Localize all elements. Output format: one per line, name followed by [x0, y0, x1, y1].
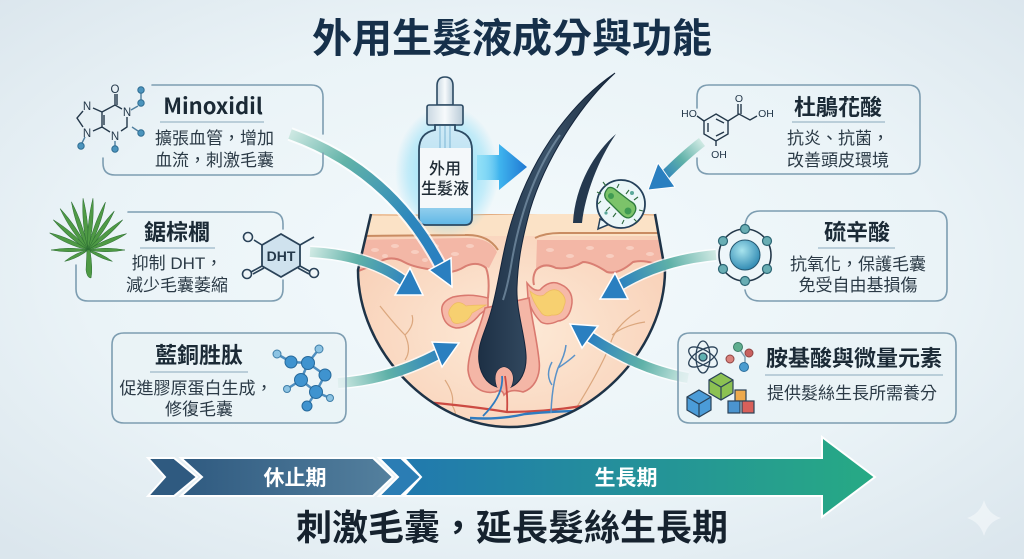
- sebaceous gland right: [527, 283, 572, 324]
- icon: phenolic molecule: [681, 93, 774, 161]
- phase: anagen arrow: 生長期: [594, 467, 658, 490]
- heading: 胺基酸與微量元素: [766, 346, 942, 371]
- phase: telogen: 休止期: [264, 467, 326, 490]
- heading: 硫辛酸: [824, 220, 890, 245]
- phase: telogen: [181, 458, 393, 496]
- hair shaft and bulb: [479, 73, 615, 387]
- heading: Minoxidil: [163, 89, 263, 121]
- arrow: saw palmetto to follicle: [310, 252, 423, 295]
- small hair: [573, 134, 616, 223]
- icon: atom: [686, 341, 720, 373]
- body text: 抑制 DHT，: [132, 254, 222, 273]
- heading: 杜鵑花酸: [794, 95, 882, 120]
- icon: bacteria speech bubble: [597, 180, 645, 229]
- arrow: copper peptide to follicle: [338, 342, 459, 383]
- bottle of topical hair tonic: 外用: [429, 160, 461, 178]
- icon: small molecule: [726, 342, 753, 372]
- panel: lipoic acid: [718, 211, 947, 301]
- icon: DHT molecule: [242, 232, 318, 278]
- icon: minoxidil molecule: N: [111, 131, 119, 143]
- arrow: lipoic acid to follicle: [600, 255, 716, 299]
- arrow: Minoxidil to follicle: [290, 134, 452, 287]
- body text: 抗氧化，保護毛囊: [790, 255, 926, 274]
- icon: minoxidil molecule: [77, 84, 144, 152]
- icon: sparkle watermark: [967, 500, 1001, 536]
- sebaceous gland left: [442, 295, 488, 328]
- icon: phenolic molecule: O: [735, 93, 743, 105]
- bottle of topical hair tonic: 生髮液: [421, 179, 469, 198]
- icon: phenolic molecule: OH: [758, 108, 774, 120]
- icon: minoxidil molecule: N: [83, 128, 91, 140]
- arrow: amino acids to follicle: [570, 324, 688, 378]
- phase chevron start: [148, 458, 197, 496]
- body text: 抗炎、抗菌，: [787, 129, 889, 148]
- bottom summary heading: 刺激毛囊，延長髮絲生長期: [296, 499, 728, 551]
- body text: 擴張血管，增加: [155, 129, 274, 148]
- phase: anagen arrow: [404, 437, 875, 517]
- scalp cross-section diagram: [350, 73, 675, 430]
- panel: azelaic acid: [681, 85, 920, 174]
- panel: saw palmetto: [49, 198, 318, 301]
- heading: 鋸棕櫚: [144, 220, 210, 245]
- panel: amino acids and trace elements: [678, 333, 956, 423]
- panel: lipoic acid: 免受自由基損傷: [798, 276, 918, 295]
- panel: Minoxidil: 血流，刺激毛囊: [155, 151, 274, 170]
- dermal papilla and vessels: [483, 367, 513, 416]
- panel: copper peptide: 修復毛囊: [165, 400, 233, 419]
- icon: DHT molecule: DHT: [267, 248, 296, 264]
- panel: azelaic acid: 改善頭皮環境: [787, 151, 889, 170]
- timeline arrow: [148, 437, 875, 517]
- phase chevron middle: [379, 458, 421, 496]
- arrow: azelaic acid to bacteria: [648, 142, 702, 190]
- body text: 提供髮絲生長所需養分: [767, 384, 937, 403]
- bottle of topical hair tonic: [395, 77, 499, 238]
- icon: minoxidil molecule: N: [83, 101, 91, 113]
- icon: phenolic molecule: OH: [711, 149, 727, 161]
- heading: 藍銅胜肽: [155, 343, 243, 368]
- panel: copper peptide: [112, 333, 346, 423]
- icon: antioxidant ring: [718, 224, 772, 286]
- icon: minoxidil molecule: N: [123, 107, 131, 119]
- arrow: bottle glow to hair: [477, 144, 527, 190]
- icon: minoxidil molecule: O: [111, 84, 120, 96]
- title: 外用生髮液成分與功能: [312, 6, 712, 64]
- icon: palm leaf: [49, 198, 127, 278]
- icon: peptide molecule: [273, 345, 334, 411]
- panel: saw palmetto: 減少毛囊萎縮: [126, 276, 228, 295]
- panel: Minoxidil: [77, 84, 323, 175]
- icon: phenolic molecule: HO: [681, 108, 697, 120]
- hair follicle sheath: [468, 298, 539, 395]
- body text: 促進膠原蛋白生成，: [120, 379, 272, 398]
- icon: building blocks: [687, 373, 754, 417]
